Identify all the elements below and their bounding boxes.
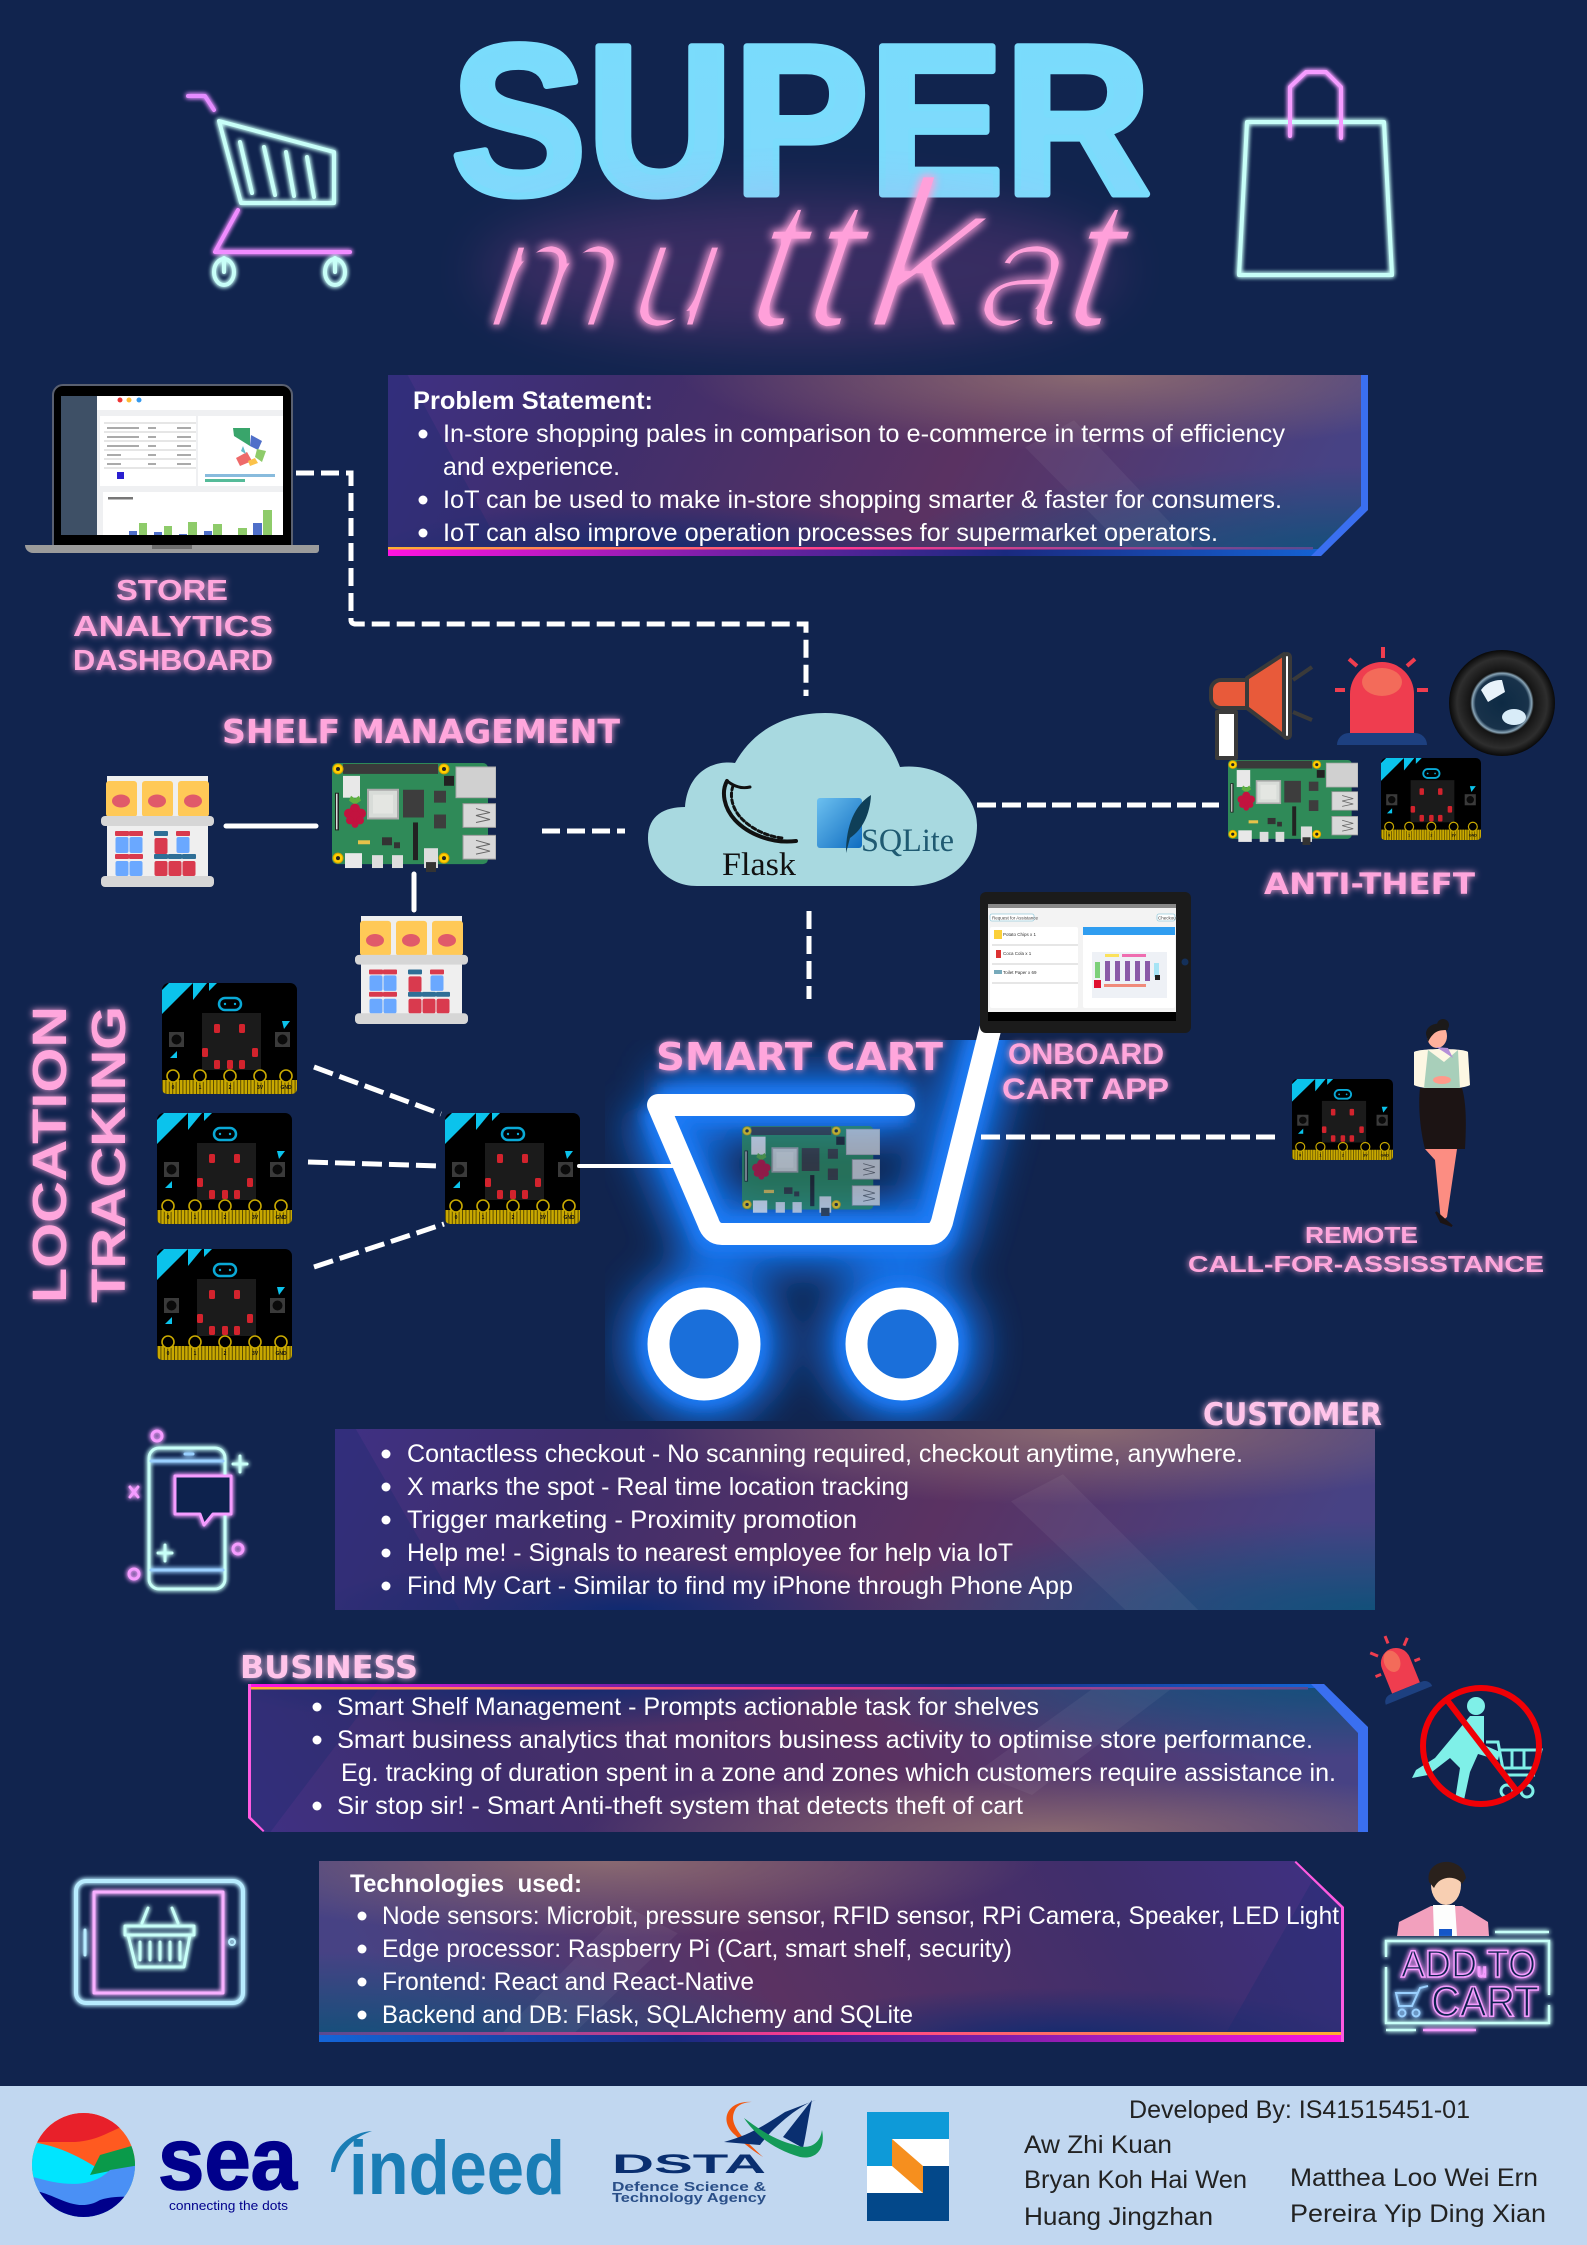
customer bullets: Help me! - Signals to nearest employee for help via IoT xyxy=(407,1539,1013,1567)
icon: microbit remote xyxy=(1292,1079,1393,1160)
title: muttkat neon script: t xyxy=(1056,161,1144,367)
heading: problem statement: Problem Statement: xyxy=(413,387,653,415)
connector: shelf to pi xyxy=(226,824,316,828)
connector: pi to lower shelf xyxy=(412,874,416,910)
business bullets xyxy=(312,1693,1336,1820)
business bullets: Smart Shelf Management - Prompts actionable task for shelves xyxy=(337,1693,1039,1721)
text: sqlite: SQLite xyxy=(861,823,954,859)
icon: tablet with cart app: Request for Assistance xyxy=(992,916,1039,920)
icon: presenter in pink blazer xyxy=(1397,1862,1489,1936)
label: location tracking xyxy=(24,1006,136,1303)
problem statement bullets: and experience. xyxy=(443,453,620,481)
icon: shelf lower xyxy=(355,916,468,1024)
icon: shelf left xyxy=(101,776,214,887)
icon: tablet with cart app xyxy=(980,892,1191,1033)
text: developers: Huang Jingzhan xyxy=(1024,2203,1213,2231)
connector: pi to cloud xyxy=(542,828,625,834)
icon: sqlite feather xyxy=(817,795,871,853)
label: location tracking: TRACKING xyxy=(83,1006,136,1303)
label: remote call-for-assistance: REMOTE xyxy=(1305,1222,1418,1248)
logo: DSTA: Defence Science & xyxy=(612,2179,766,2194)
connector: cart to remote assistance xyxy=(981,1134,1275,1140)
icon: no cart theft sign xyxy=(1412,1688,1541,1804)
connector: cloud to smart cart xyxy=(806,911,812,999)
label: customer: CUSTOMER xyxy=(1203,1397,1382,1433)
business bullets: Smart business analytics that monitors business activity to optimise store performance. xyxy=(337,1726,1313,1754)
customer bullets: Trigger marketing - Proximity promotion xyxy=(407,1506,857,1534)
connector: cloud to anti-theft xyxy=(977,802,1219,808)
label: onboard cart app: CART APP xyxy=(1002,1073,1169,1106)
business bullets: Eg. tracking of duration spent in a zone and zones which customers require assistance in. xyxy=(341,1759,1336,1787)
logo: indeed: indeed xyxy=(349,2126,565,2211)
connector: dashboard to cloud xyxy=(296,473,806,696)
icon: microbit tracker 2 xyxy=(157,1113,292,1224)
icon: microbit cart hub xyxy=(445,1113,580,1224)
text: developers: Developed By: IS41515451-01 xyxy=(1129,2096,1470,2124)
label: remote call-for-assistance: CALL-FOR-ASSISSTANCE xyxy=(1188,1251,1544,1277)
technologies bullets: Edge processor: Raspberry Pi (Cart, smart shelf, security) xyxy=(382,1935,1012,1963)
icon: microbit tracker 1 xyxy=(162,983,297,1094)
icon: neon shopping bag xyxy=(1239,72,1392,275)
icon: add to cart neon sign: ADDuTO xyxy=(1401,1944,1536,1986)
logo: DSTA: DSTA xyxy=(612,2149,766,2179)
icon: red alarm xyxy=(1335,647,1428,745)
logo: DSTA xyxy=(612,2100,823,2205)
label: onboard cart app: ONBOARD xyxy=(1008,1038,1164,1071)
title: muttkat neon script: k xyxy=(860,137,1007,372)
label: smart cart: SMART CART xyxy=(656,1035,943,1079)
label: store analytics dashboard: STORE xyxy=(116,575,228,607)
logo: DSTA: Technology Agency xyxy=(612,2190,767,2205)
panel: business xyxy=(248,1684,1368,1832)
label: anti-theft: ANTI-THEFT xyxy=(1264,867,1475,901)
icon: tablet with cart app: Potato Chips x 1 xyxy=(1003,932,1037,937)
icon: speaker xyxy=(1211,654,1312,758)
icon: tablet with cart app: Checkout xyxy=(1158,916,1178,920)
footer band xyxy=(0,2086,1587,2245)
icon: smart cart neon xyxy=(657,1018,993,1390)
title: muttkat neon script: t xyxy=(739,161,827,367)
connectors: trackers to hub xyxy=(308,1067,444,1267)
title: muttkat neon script: u xyxy=(623,188,734,361)
icon: assistant woman xyxy=(1414,1019,1470,1226)
heading: technologies used: Technologies used: xyxy=(350,1870,582,1898)
icon: microbit anti-theft xyxy=(1381,758,1481,840)
problem statement bullets: IoT can also improve operation processes for supermarket operators. xyxy=(443,519,1218,547)
label: store analytics dashboard xyxy=(73,575,273,677)
logo: sea: connecting the dots xyxy=(169,2198,289,2213)
icon: raspberry pi shelf xyxy=(332,763,496,872)
icon: tilted red alarm xyxy=(1362,1627,1432,1705)
label: store analytics dashboard: ANALYTICS xyxy=(73,611,273,643)
title: muttkat neon script: a xyxy=(970,188,1081,361)
text: developers: Matthea Loo Wei Ern xyxy=(1290,2164,1538,2192)
technologies bullets: Backend and DB: Flask, SQLAlchemy and SQLite xyxy=(382,2001,913,2029)
text: developers: Aw Zhi Kuan xyxy=(1024,2131,1172,2159)
icon: tablet with cart app: Coca Cola x 1 xyxy=(1003,951,1032,956)
customer bullets: X marks the spot - Real time location tracking xyxy=(407,1473,909,1501)
business bullets: Sir stop sir! - Smart Anti-theft system that detects theft of cart xyxy=(337,1792,1023,1820)
technologies bullets xyxy=(358,1902,1339,2029)
logo: square mark xyxy=(867,2112,949,2221)
label: store analytics dashboard: DASHBOARD xyxy=(73,645,273,677)
panel: problem statement xyxy=(388,375,1368,556)
icon: neon phone xyxy=(129,1431,247,1589)
customer bullets: Find My Cart - Similar to find my iPhone through Phone App xyxy=(407,1572,1073,1600)
cloud: flask and sqlite xyxy=(648,713,977,886)
title: muttkat neon script xyxy=(480,137,1147,372)
icon: tablet with cart app: Toilet Paper x 69 xyxy=(1003,970,1037,975)
text: developers: Pereira Yip Ding Xian xyxy=(1290,2200,1546,2228)
icon: flask horn xyxy=(724,781,796,842)
icon: neon shopping cart xyxy=(188,96,350,285)
text: flask: Flask xyxy=(722,847,797,883)
icon: microbit tracker 3 xyxy=(157,1249,292,1360)
label: business: BUSINESS xyxy=(240,1650,418,1686)
technologies bullets: Node sensors: Microbit, pressure sensor, RFID sensor, RPi Camera, Speaker, LED Light xyxy=(382,1902,1339,1930)
label: shelf management: SHELF MANAGEMENT xyxy=(222,712,620,751)
text: developers xyxy=(1024,2096,1546,2231)
title: SUPER: SUPER xyxy=(451,1,1151,240)
label: remote call-for-assistance xyxy=(1188,1222,1544,1277)
problem statement bullets xyxy=(418,420,1286,547)
title: muttkat neon script: m xyxy=(481,188,635,361)
text: developers: Bryan Koh Hai Wen xyxy=(1024,2166,1247,2194)
icon: raspberry pi anti-theft xyxy=(1228,760,1358,845)
icon: camera lens xyxy=(1449,650,1555,756)
title: muttkat neon script: t xyxy=(796,161,884,367)
technologies bullets: Frontend: React and React-Native xyxy=(382,1968,754,1996)
icon: laptop with store dashboard xyxy=(25,385,319,553)
icon: neon basket tablet xyxy=(76,1881,243,2003)
label: onboard cart app xyxy=(1002,1038,1169,1106)
panel: customer xyxy=(335,1429,1375,1610)
customer bullets xyxy=(382,1440,1243,1600)
customer bullets: Contactless checkout - No scanning required, checkout anytime, anywhere. xyxy=(407,1440,1243,1468)
problem statement bullets: In-store shopping pales in comparison to e-commerce in terms of efficiency xyxy=(443,420,1286,448)
connector: hub to cart xyxy=(579,1164,672,1168)
problem statement bullets: IoT can be used to make in-store shopping smarter & faster for consumers. xyxy=(443,486,1282,514)
label: location tracking: LOCATION xyxy=(24,1006,77,1303)
logo: sea xyxy=(30,2109,298,2220)
icon: add to cart neon sign xyxy=(1386,1932,1549,2030)
logo: sea: sea xyxy=(158,2109,298,2208)
icon: add to cart neon sign: CART xyxy=(1431,1978,1539,2026)
panel: technologies used xyxy=(319,1861,1344,2042)
